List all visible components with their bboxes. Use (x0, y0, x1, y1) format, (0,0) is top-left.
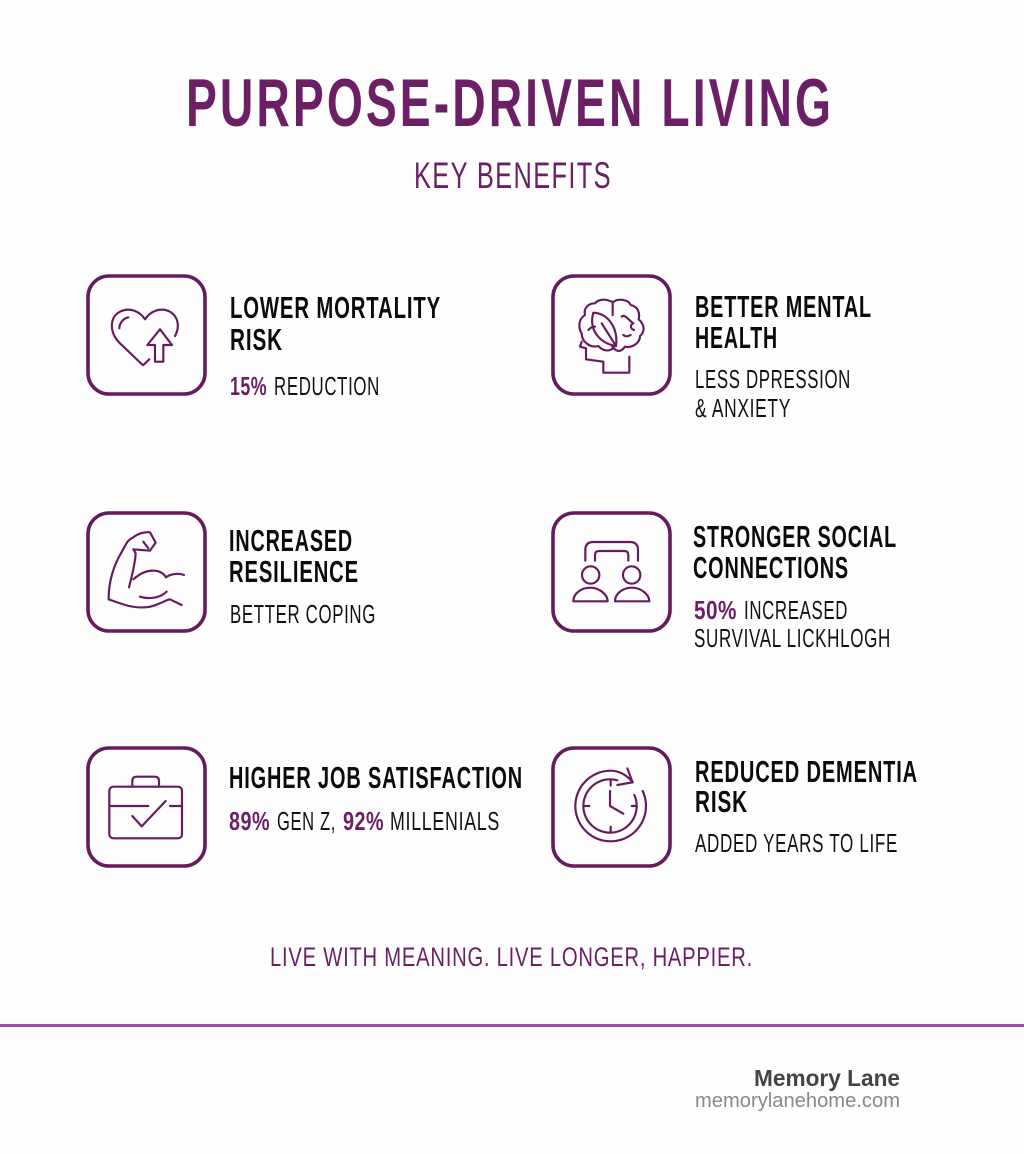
heading (693, 520, 897, 585)
stat text: MILLENIALS (390, 808, 500, 836)
icon: clock with circular arrow (553, 748, 670, 866)
icon: flexed arm (88, 513, 205, 631)
heading: BETTER MENTAL (695, 290, 872, 324)
footer brand: memorylanehome.com (695, 1090, 900, 1112)
icon: briefcase with check (88, 748, 205, 866)
heading: STRONGER SOCIAL (693, 520, 897, 554)
body text: ADDED YEARS TO LIFE (695, 830, 898, 858)
heading (695, 290, 872, 355)
stat text (229, 808, 500, 836)
subtitle: KEY BENEFITS (414, 155, 612, 196)
stat text: GEN Z, (277, 808, 336, 836)
heading (229, 524, 359, 589)
body text: BETTER COPING (230, 601, 376, 629)
heading: RESILIENCE (229, 555, 359, 589)
heading: INCREASED (229, 524, 353, 558)
panel: better mental health (553, 276, 872, 423)
body text: & ANXIETY (695, 395, 791, 423)
heading: RISK (695, 785, 748, 819)
stat text: 15% (230, 373, 267, 401)
heading: HEALTH (695, 321, 778, 355)
heading (695, 755, 918, 819)
footer divider (0, 1024, 1024, 1027)
icon: two connected people (553, 513, 670, 631)
icon: brain with leaf (553, 276, 670, 394)
panel: stronger social connections (553, 513, 897, 653)
stat text: SURVIVAL LICKHLOGH (694, 625, 891, 653)
heading (230, 291, 441, 357)
panel: reduced dementia risk (553, 748, 918, 866)
stat text: REDUCTION (274, 373, 380, 401)
heading: CONNECTIONS (693, 551, 849, 585)
stat text (230, 373, 380, 401)
stat text: INCREASED (744, 597, 848, 625)
heading: LOWER MORTALITY (230, 291, 441, 325)
footer brand (695, 1065, 900, 1112)
stat text (694, 597, 891, 653)
body text: LESS DPRESSION (695, 366, 851, 394)
panel: higher job satisfaction (88, 748, 523, 866)
stat text: 50% (694, 597, 737, 625)
panel: lower mortality risk (88, 276, 441, 401)
footer brand: Memory Lane (754, 1065, 900, 1091)
stat text: 92% (343, 808, 384, 836)
body text (695, 366, 851, 423)
panel: increased resilience (88, 513, 376, 631)
heading: RISK (230, 323, 283, 357)
tagline: LIVE WITH MEANING. LIVE LONGER, HAPPIER. (270, 942, 753, 972)
icon: heart with up arrow (88, 276, 205, 394)
stat text: 89% (229, 808, 270, 836)
heading: HIGHER JOB SATISFACTION (229, 761, 523, 795)
